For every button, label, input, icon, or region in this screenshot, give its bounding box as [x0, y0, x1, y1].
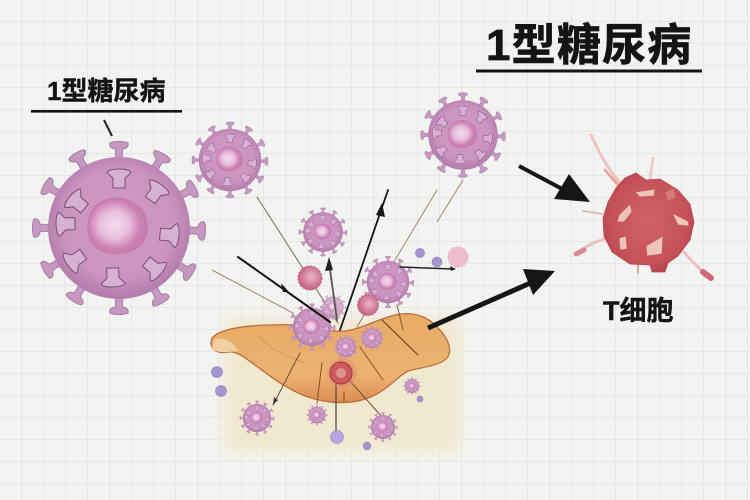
arrow to T cell (upper): [519, 166, 590, 202]
T cell label: T细胞: [603, 296, 674, 326]
left label underline: [31, 110, 182, 113]
small purple particles: [212, 248, 442, 450]
virus top right: [421, 93, 506, 177]
arrow from pancreas to T cell: [428, 269, 555, 328]
title: 1型糖尿病: [486, 21, 692, 70]
pancreas: [211, 314, 450, 403]
T cell: [576, 135, 711, 278]
small pointer arrow: [104, 120, 112, 136]
dark arrows converging on pancreas: [238, 190, 456, 405]
background wash behind pancreas: [224, 318, 460, 452]
left label: 1型糖尿病: [47, 76, 165, 106]
title underline: [476, 70, 702, 72]
infected red cells: [298, 247, 468, 388]
virus upper left: [192, 122, 268, 198]
cluster of viruses around pancreas: [240, 208, 421, 442]
large virus: [32, 142, 206, 314]
thin connector lines: [212, 180, 463, 437]
